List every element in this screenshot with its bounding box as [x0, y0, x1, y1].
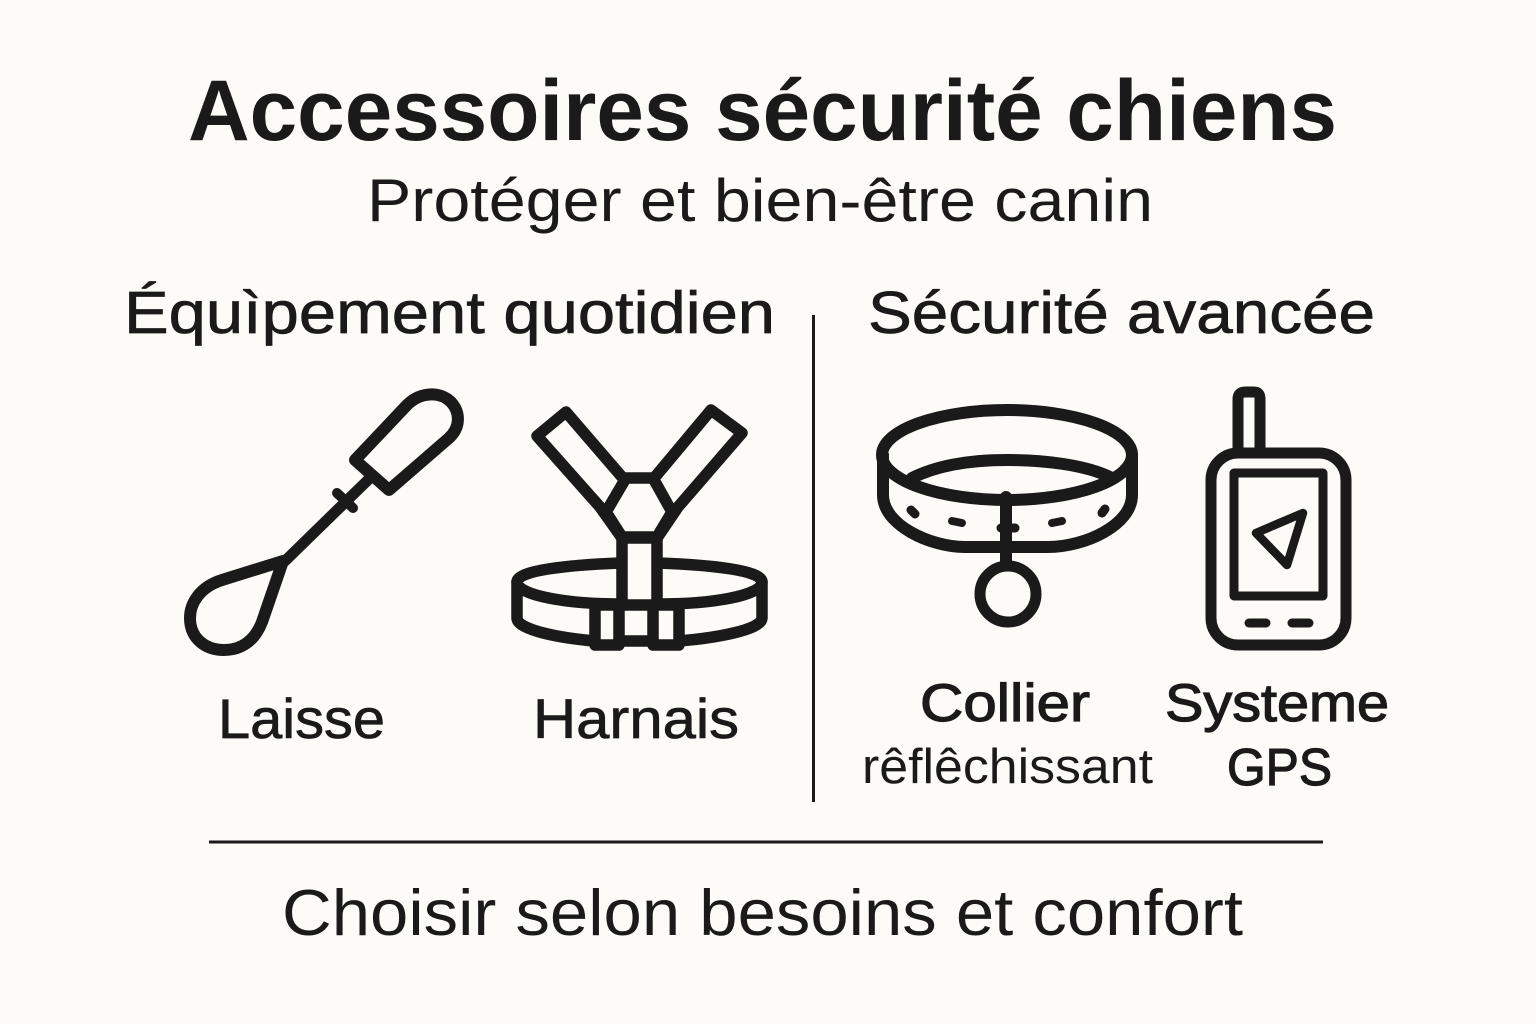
icon: leash [190, 394, 458, 650]
label: Systeme GPS: Systeme [1165, 674, 1389, 733]
label: Systeme GPS [1165, 674, 1389, 797]
label: Collier réfléchissant [862, 674, 1153, 794]
subtitle: Protéger et bien-être canin [367, 167, 1153, 234]
vertical divider [812, 315, 815, 802]
label: Collier réfléchissant: rêflêchissant [862, 740, 1153, 794]
label: Harnais: Harnais [533, 687, 739, 750]
icon: GPS device [1211, 392, 1346, 645]
label: Systeme GPS: GPS [1227, 739, 1332, 797]
icon: collar [882, 410, 1132, 622]
footer text: Choisir selon besoins et confort [282, 876, 1243, 949]
heading: Sécurité avancée: Sécurité avancée [868, 280, 1375, 346]
icon: harness [517, 410, 762, 645]
title: Accessoires sécurité chiens [188, 63, 1337, 159]
heading: Équipement quotidien: Équìpement quotidien [124, 280, 775, 346]
label: Collier réfléchissant: Collier [920, 674, 1090, 733]
horizontal divider [209, 840, 1323, 844]
label: Laisse: Laisse [218, 687, 385, 750]
